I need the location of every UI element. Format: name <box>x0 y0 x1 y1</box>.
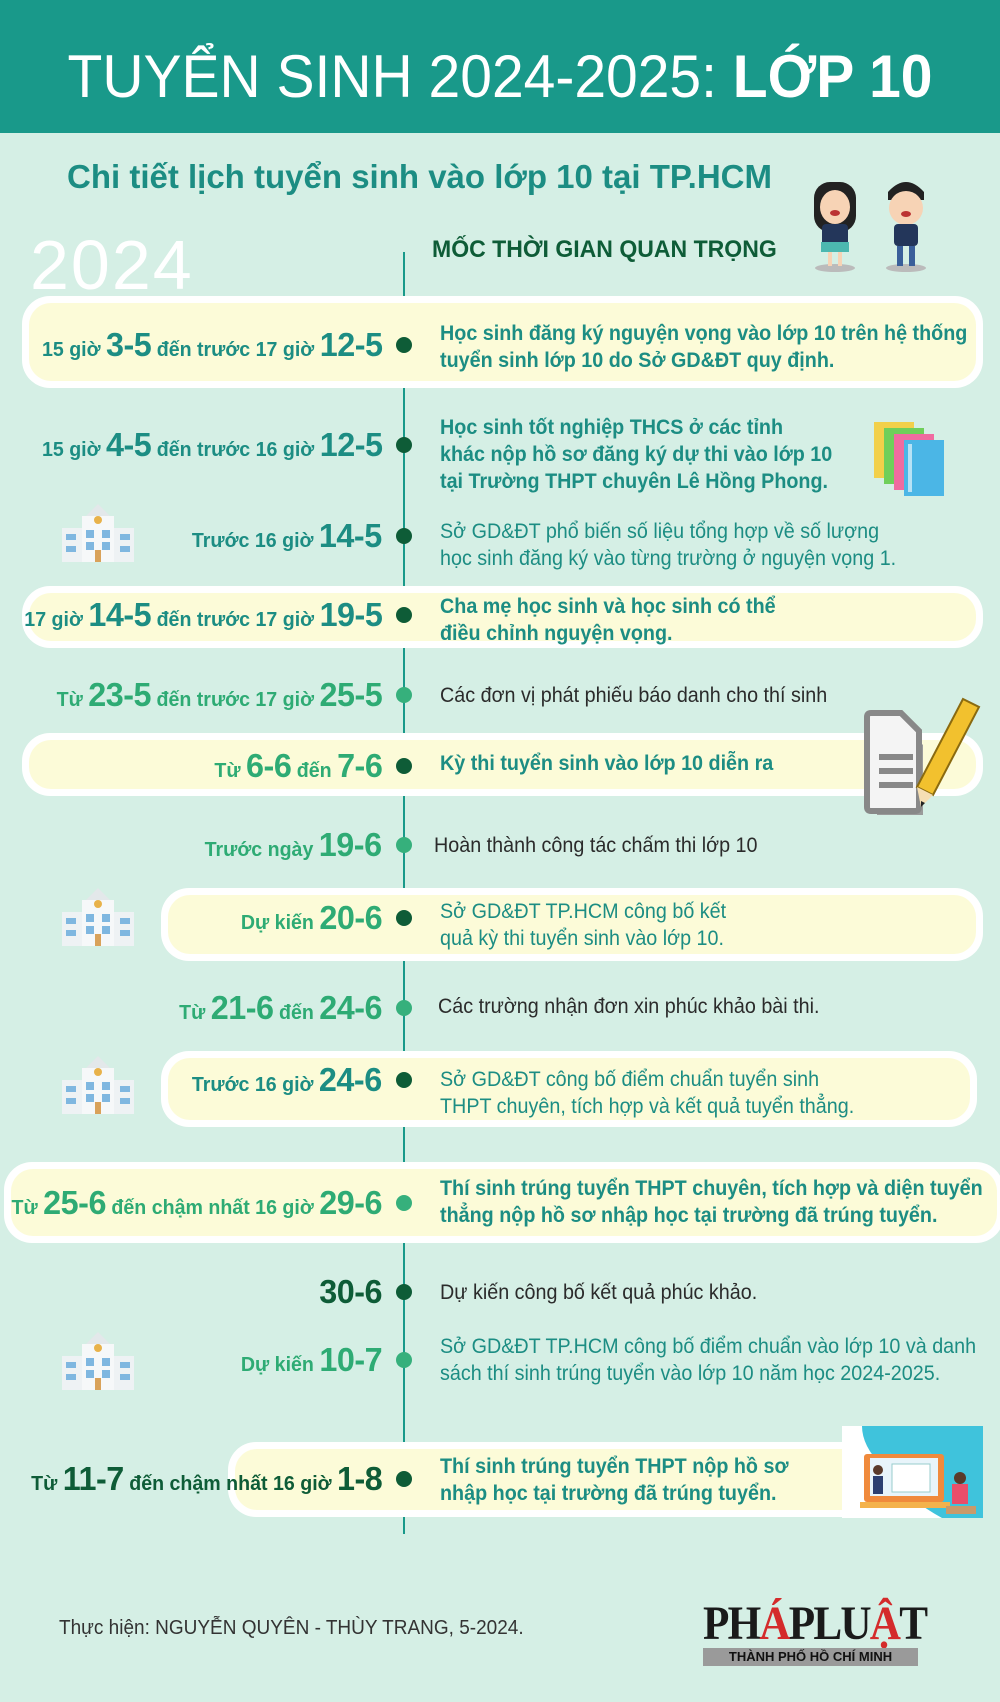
row 4 text <box>440 595 776 645</box>
row 11 text: Thí sinh trúng tuyển THPT chuyên, tích hợp và diện tuyển <box>440 1177 983 1200</box>
row 1 date: 15 giờ 3-5 đến trước 17 giờ 12-5 <box>41 326 382 363</box>
row 4 date: 17 giờ 14-5 đến trước 17 giờ 19-5 <box>24 596 382 633</box>
row 3 dot <box>396 528 412 544</box>
row 7 date: Trước ngày 19-6 <box>205 826 382 863</box>
row 13 dot <box>396 1352 412 1368</box>
row 13 text <box>440 1335 976 1385</box>
row 12 dot <box>396 1284 412 1300</box>
row 1 dot <box>396 337 412 353</box>
subtitle: Chi tiết lịch tuyển sinh vào lớp 10 tại TP.HCM <box>67 158 772 195</box>
row 5 text: Các đơn vị phát phiếu báo danh cho thí sinh <box>440 684 827 707</box>
row 3 text: học sinh đăng ký vào từng trường ở nguyện vọng 1. <box>440 547 896 570</box>
logo: Phap Luat: PHÁPLUẬT <box>703 1597 926 1650</box>
logo: Phap Luat: THÀNH PHỐ HỒ CHÍ MINH <box>729 1649 892 1664</box>
row 10 date: Trước 16 giờ 24-6 <box>192 1061 382 1098</box>
section heading: MỐC THỜI GIAN QUAN TRỌNG <box>432 236 777 263</box>
icon: books <box>874 422 944 496</box>
icon: students <box>814 182 926 272</box>
row 4 box <box>22 586 983 648</box>
row 7 text: Hoàn thành công tác chấm thi lớp 10 <box>434 834 758 857</box>
row 10 text: Sở GD&ĐT công bố điểm chuẩn tuyển sinh <box>440 1068 819 1091</box>
row 14 dot <box>396 1471 412 1487</box>
row 2 text: khác nộp hồ sơ đăng ký dự thi vào lớp 10 <box>440 443 832 466</box>
row 12 date: 30-6 <box>319 1273 382 1310</box>
row 13 date: Dự kiến 10-7 <box>241 1341 382 1378</box>
row 6 dot <box>396 758 412 774</box>
row 10 building icon <box>62 1056 134 1114</box>
row 11 text: thẳng nộp hồ sơ nhập học tại trường đã trúng tuyển. <box>440 1204 937 1227</box>
row 11 box <box>4 1162 1000 1243</box>
header banner <box>0 0 1000 133</box>
row 8 box <box>161 888 983 961</box>
row 13 text: Sở GD&ĐT TP.HCM công bố điểm chuẩn vào lớp 10 và danh <box>440 1335 976 1358</box>
row 2 date: 15 giờ 4-5 đến trước 16 giờ 12-5 <box>41 426 382 463</box>
row 3 date: Trước 16 giờ 14-5 <box>192 517 382 554</box>
row 3 building icon <box>62 504 134 562</box>
row 4 dot <box>396 607 412 623</box>
row 14 text: Thí sinh trúng tuyển THPT nộp hồ sơ <box>440 1455 788 1478</box>
credits: Thực hiện: NGUYỄN QUYÊN - THÙY TRANG, 5-2024. <box>59 1617 524 1639</box>
row 10 box <box>161 1051 977 1127</box>
row 8 date: Dự kiến 20-6 <box>241 899 382 936</box>
row 10 text: THPT chuyên, tích hợp và kết quả tuyển thẳng. <box>440 1095 854 1118</box>
row 8 text <box>440 900 726 950</box>
row 11 date: Từ 25-6 đến chậm nhất 16 giờ 29-6 <box>12 1184 382 1221</box>
row 8 text: quả kỳ thi tuyển sinh vào lớp 10. <box>440 927 724 950</box>
row 1 box <box>22 296 983 388</box>
row 2 text <box>440 416 832 493</box>
row 5 dot <box>396 687 412 703</box>
row 4 text: Cha mẹ học sinh và học sinh có thể <box>440 595 776 618</box>
row 2 text: tại Trường THPT chuyên Lê Hồng Phong. <box>440 470 828 493</box>
row 2 dot <box>396 437 412 453</box>
row 1 text: Học sinh đăng ký nguyện vọng vào lớp 10 trên hệ thống <box>440 322 967 345</box>
year label 2024: 2024 <box>30 226 194 304</box>
row 13 text: sách thí sinh trúng tuyển vào lớp 10 năm học 2024-2025. <box>440 1362 940 1385</box>
row 3 text <box>440 520 896 570</box>
row 8 text: Sở GD&ĐT TP.HCM công bố kết <box>440 900 726 923</box>
row 14 box <box>228 1442 983 1517</box>
row 10 text <box>440 1068 854 1118</box>
row 14 text: nhập học tại trường đã trúng tuyển. <box>440 1482 776 1505</box>
row 1 text: tuyển sinh lớp 10 do Sở GD&ĐT quy định. <box>440 349 834 372</box>
row 11 dot <box>396 1195 412 1211</box>
row 14 text <box>440 1455 789 1505</box>
row 11 text <box>440 1177 983 1227</box>
row 6 date: Từ 6-6 đến 7-6 <box>214 747 382 784</box>
row 7 dot <box>396 837 412 853</box>
row 12 text: Dự kiến công bố kết quả phúc khảo. <box>440 1281 757 1304</box>
row 14 date: Từ 11-7 đến chậm nhất 16 giờ 1-8 <box>31 1460 382 1497</box>
row 5 date: Từ 23-5 đến trước 17 giờ 25-5 <box>56 676 382 713</box>
timeline axis <box>403 252 405 1534</box>
row 13 building icon <box>62 1332 134 1390</box>
icon: paper and pencil <box>864 698 980 815</box>
row 10 dot <box>396 1072 412 1088</box>
title: TUYỂN SINH 2024-2025: LỚP 10 <box>68 43 932 110</box>
row 2 text: Học sinh tốt nghiệp THCS ở các tỉnh <box>440 416 783 439</box>
row 1 text <box>440 322 967 372</box>
row 4 text: điều chỉnh nguyện vọng. <box>440 622 673 645</box>
row 9 text: Các trường nhận đơn xin phúc khảo bài thi. <box>438 995 819 1018</box>
illustration: online study <box>842 1426 983 1518</box>
row 6 text: Kỳ thi tuyển sinh vào lớp 10 diễn ra <box>440 752 773 775</box>
row 6 box <box>22 733 983 796</box>
row 9 date: Từ 21-6 đến 24-6 <box>179 989 382 1026</box>
row 9 dot <box>396 1000 412 1016</box>
row 8 building icon <box>62 888 134 946</box>
row 8 dot <box>396 910 412 926</box>
row 3 text: Sở GD&ĐT phổ biến số liệu tổng hợp về số lượng <box>440 520 879 543</box>
